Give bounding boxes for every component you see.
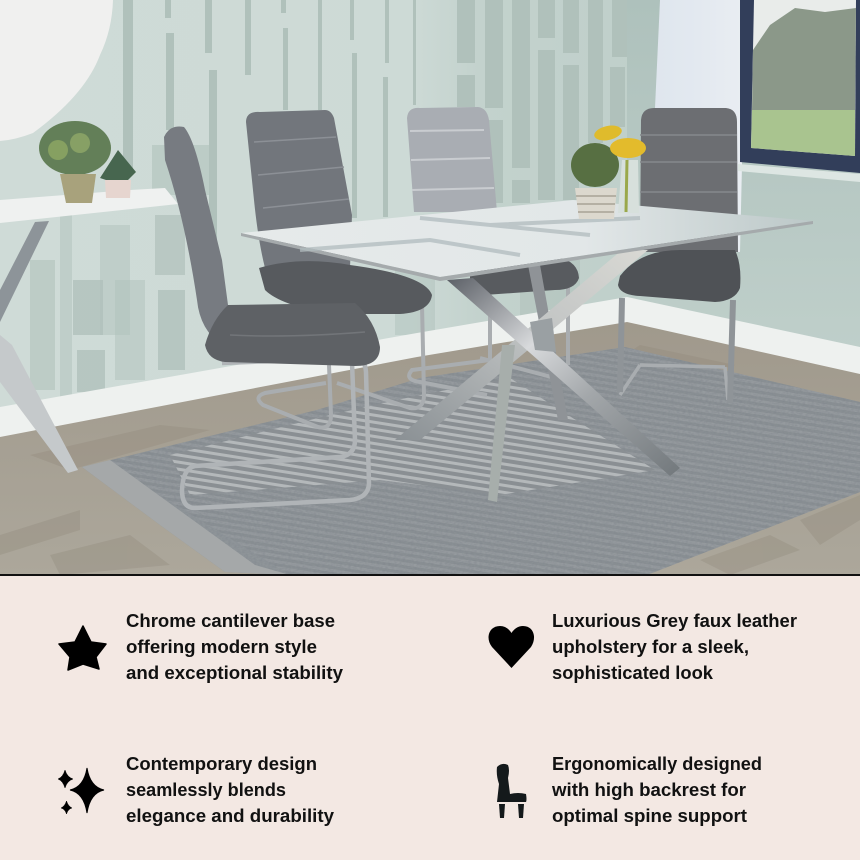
table top <box>241 200 813 281</box>
back middle chair <box>407 107 579 395</box>
feature text: contemporary design <box>126 753 335 826</box>
feature text: chrome base: and exceptional stability <box>126 662 344 683</box>
plant on console <box>39 121 136 203</box>
panel: features <box>0 574 860 860</box>
back left chair <box>246 110 432 428</box>
rug <box>82 347 860 575</box>
icon: star <box>59 626 106 670</box>
skirting board <box>0 297 860 438</box>
feature text: upholstery: Luxurious Grey faux leather <box>552 610 797 631</box>
feature text: ergonomic <box>551 753 762 826</box>
feature text: chrome base <box>126 610 344 683</box>
table plant and flowers <box>571 123 646 219</box>
round mirror <box>0 0 113 141</box>
feature text: upholstery: sophisticated look <box>552 662 714 683</box>
window <box>738 0 860 182</box>
feature text: contemporary design: elegance and durability <box>126 805 335 826</box>
console table <box>0 188 178 473</box>
feature text: chrome base: Chrome cantilever base <box>126 610 335 631</box>
icon: sparkles <box>58 768 104 814</box>
front left chair <box>164 126 380 508</box>
table base <box>395 250 680 502</box>
feature text: contemporary design: seamlessly blends <box>126 779 286 800</box>
photo: dining room scene <box>0 0 860 575</box>
feature text: upholstery <box>552 610 797 683</box>
feature text: contemporary design: Contemporary design <box>126 753 317 774</box>
floor planks <box>0 345 860 575</box>
feature text: ergonomic: optimal spine support <box>552 805 747 826</box>
feature text: ergonomic: with high backrest for <box>551 779 746 800</box>
feature text: chrome base: offering modern style <box>126 636 317 657</box>
floor <box>0 322 860 575</box>
feature text: upholstery: upholstery for a sleek, <box>552 636 749 657</box>
feature text: ergonomic: Ergonomically designed <box>552 753 762 774</box>
left wall <box>0 0 664 420</box>
icon: chair <box>497 764 526 818</box>
wall lattice panels <box>30 0 627 400</box>
right wall <box>627 0 860 350</box>
icon: heart <box>489 626 534 668</box>
back right chair <box>618 108 740 403</box>
curtain <box>655 0 742 252</box>
